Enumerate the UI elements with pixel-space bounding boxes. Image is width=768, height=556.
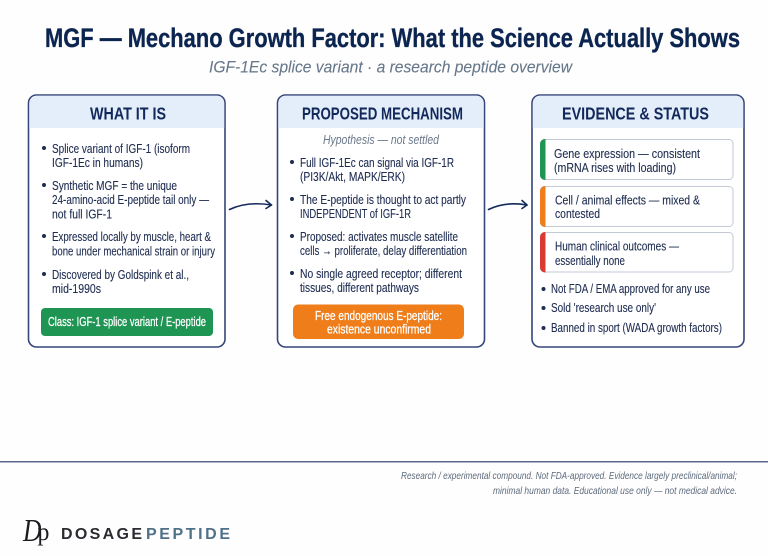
panel heading: WHAT IT IS (90, 104, 166, 124)
bullet list: Synthetic MGF = the unique (52, 179, 177, 193)
panel frame (278, 95, 484, 347)
bullet list: Full IGF-1Ec can signal via IGF-1R (300, 156, 454, 170)
subtitle: IGF-1Ec splice variant · a research peptide overview (209, 58, 574, 76)
logo (22, 513, 230, 549)
panel frame (532, 95, 744, 347)
logo: D (22, 513, 42, 549)
status bullet list: Sold 'research use only' (551, 301, 656, 315)
evidence card: cell and animal effects: contested (555, 207, 600, 221)
bullet list: IGF-1Ec in humans) (52, 156, 143, 170)
bullet list: tissues, different pathways (300, 281, 419, 295)
bullet list: mid-1990s (52, 282, 101, 296)
logo: DOSAGE (61, 526, 142, 543)
warning badge (293, 304, 464, 339)
bullet list: No single agreed receptor; different (300, 267, 462, 281)
evidence card: cell and animal effects: Cell / animal effects — mixed & (555, 194, 700, 208)
panel: evidence and status (532, 95, 744, 347)
bullet list: bone under mechanical strain or injury (52, 244, 216, 258)
evidence card: gene expression (540, 139, 733, 180)
class badge: Class: IGF-1 splice variant / E-peptide (48, 315, 206, 329)
status bullet list (542, 282, 722, 335)
bullet list (290, 156, 467, 295)
bullet list: Proposed: activates muscle satellite (300, 230, 458, 244)
disclaimer (401, 470, 737, 497)
bullet list: INDEPENDENT of IGF-1R (300, 207, 411, 221)
evidence card: cell and animal effects (540, 186, 733, 227)
bullet list: The E-peptide is thought to act partly (300, 193, 467, 207)
panel header band (29, 96, 224, 128)
panel: proposed mechanism (278, 95, 484, 347)
status bullet list: Not FDA / EMA approved for any use (551, 282, 710, 296)
bullet list: Expressed locally by muscle, heart & (52, 230, 211, 244)
panel heading: EVIDENCE & STATUS (562, 104, 709, 124)
arrow: what it is to mechanism (230, 200, 272, 210)
bullet list (42, 142, 216, 296)
panel header band (533, 96, 743, 128)
logo: PEPTIDE (146, 526, 230, 543)
bullet list: not full IGF-1 (52, 208, 112, 222)
class badge (41, 308, 213, 336)
warning badge: existence unconfirmed (327, 322, 431, 336)
hypothesis note: Hypothesis — not settled (323, 133, 440, 147)
panel heading: PROPOSED MECHANISM (302, 104, 463, 124)
evidence card: gene expression: Gene expression — consistent (554, 147, 700, 161)
warning badge: Free endogenous E-peptide: (315, 309, 442, 323)
bullet list: 24-amino-acid E-peptide tail only — (52, 193, 209, 207)
evidence card: human outcomes: essentially none (555, 254, 625, 268)
panel: what it is (28, 95, 225, 347)
evidence card: human outcomes: Human clinical outcomes — (555, 240, 679, 254)
bullet list: cells → proliferate, delay differentiation (300, 244, 467, 258)
evidence card: human outcomes (540, 232, 733, 272)
panel frame (28, 95, 225, 347)
bullet list: (PI3K/Akt, MAPK/ERK) (300, 170, 405, 184)
arrow: mechanism to evidence (488, 200, 527, 210)
logo: p (38, 518, 49, 546)
bullet list: Splice variant of IGF-1 (isoform (52, 142, 190, 156)
panel header band (278, 96, 484, 128)
bullet list: Discovered by Goldspink et al., (52, 268, 189, 282)
evidence card: gene expression: (mRNA rises with loading) (554, 161, 676, 175)
status bullet list: Banned in sport (WADA growth factors) (551, 321, 722, 335)
